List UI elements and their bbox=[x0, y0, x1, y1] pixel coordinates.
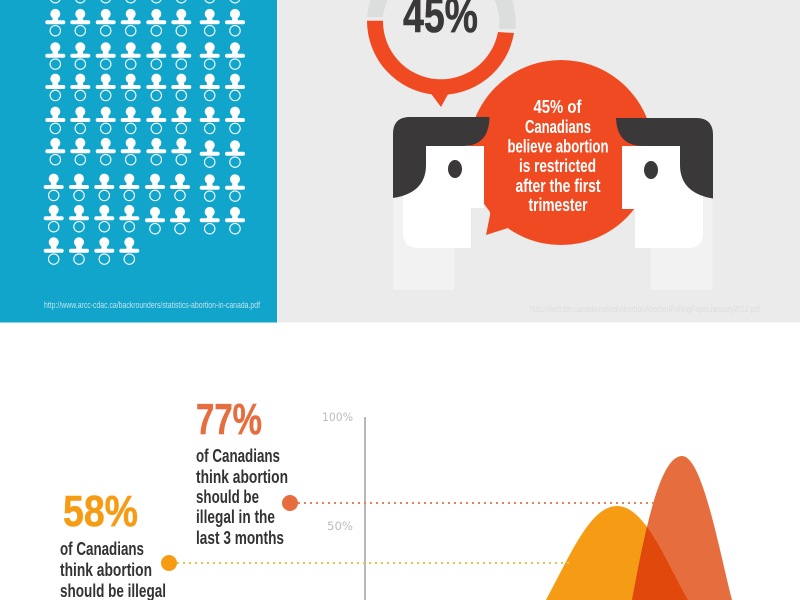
stat: 58 percent: think abortion bbox=[60, 559, 152, 580]
bubble text: after the first bbox=[516, 175, 600, 196]
head: left person bbox=[393, 117, 490, 290]
source link: blue panel: http://www.arcc-cdac.ca/backrounders/statistics-abortion-in-canada.pdf bbox=[44, 300, 260, 311]
stat: 58 percent: 58% bbox=[63, 487, 138, 536]
leader line: 77 percent bbox=[298, 502, 655, 504]
stat: 58 percent bbox=[60, 487, 166, 600]
stat: 77 percent bbox=[196, 395, 288, 548]
bubble text: believe abortion bbox=[508, 136, 608, 156]
axis label 100%: 100% bbox=[322, 410, 353, 424]
bubble text: Canadians bbox=[525, 116, 591, 137]
axis line bbox=[364, 417, 366, 600]
curve: 77 percent bbox=[632, 456, 732, 600]
head: right person bbox=[616, 118, 713, 290]
marker dot: 77 percent bbox=[282, 495, 298, 511]
donut chart: 45 percent bbox=[367, 0, 516, 107]
stat: 77 percent: illegal in the bbox=[196, 506, 275, 527]
bubble text: is restricted bbox=[519, 155, 596, 176]
stat: 77 percent: 77% bbox=[196, 395, 262, 444]
stat: 77 percent: should be bbox=[196, 486, 259, 507]
speech bubble bbox=[468, 60, 654, 245]
marker dot: 58 percent bbox=[161, 555, 177, 571]
stat: 77 percent: last 3 months bbox=[196, 527, 284, 548]
curve overlap bbox=[632, 527, 688, 600]
panel: blue pacifier statistic bbox=[0, 0, 277, 323]
panel: gray conversation bbox=[277, 0, 800, 323]
stat: 77 percent: of Canadians bbox=[196, 445, 280, 466]
stat: 77 percent: think abortion bbox=[196, 466, 288, 487]
bubble text bbox=[508, 96, 608, 215]
leader line: 58 percent bbox=[177, 562, 572, 564]
axis label 50%: 50% bbox=[327, 519, 353, 533]
bubble text: trimester bbox=[528, 194, 588, 215]
stat: 58 percent: of Canadians bbox=[60, 538, 144, 559]
curve: 58 percent bbox=[546, 506, 688, 600]
bubble text: 45% of bbox=[534, 96, 582, 117]
icon grid: pacifiers bbox=[44, 0, 245, 264]
chart: opinion curves bbox=[161, 410, 732, 600]
